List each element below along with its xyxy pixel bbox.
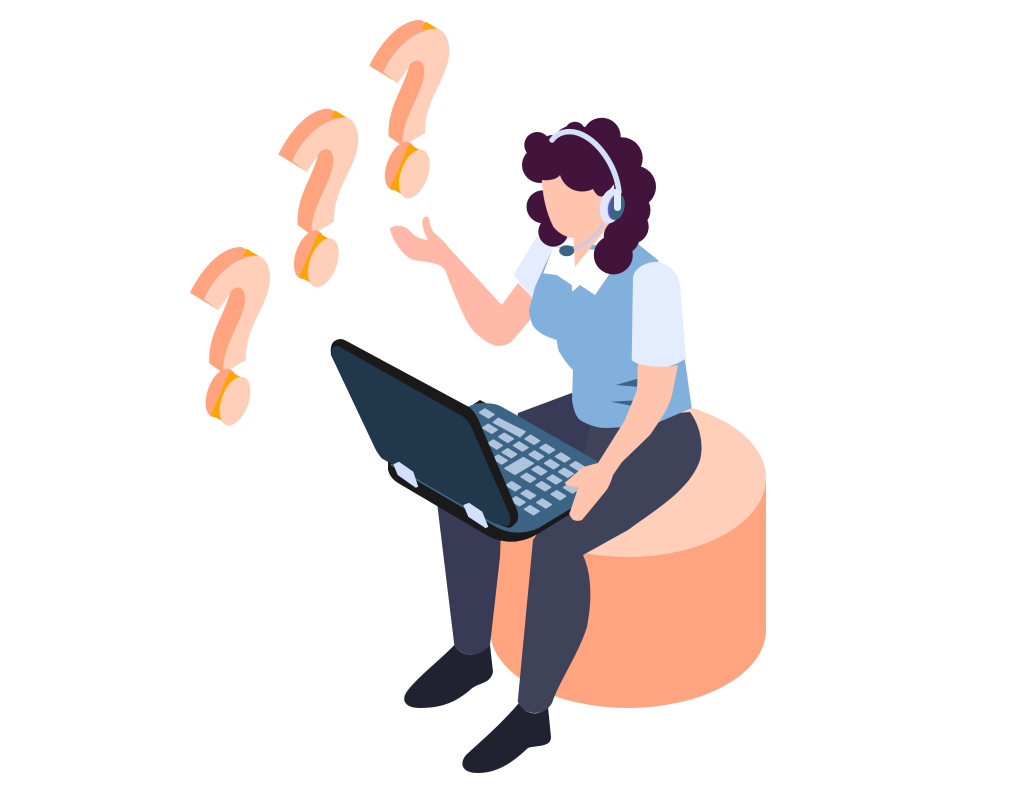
keyboard deck (390, 403, 598, 533)
cylinder stool (490, 399, 766, 708)
laptop base (388, 400, 598, 542)
headset (552, 132, 627, 256)
vest wrinkle upper (616, 378, 640, 387)
laptop (331, 339, 598, 542)
shirt collar (543, 247, 610, 295)
neck (573, 222, 612, 267)
right sleeve (632, 262, 686, 368)
headset band (552, 132, 619, 192)
mic boom (574, 223, 604, 249)
left arm and raised hand (390, 217, 532, 346)
face (542, 160, 610, 238)
icon: question mark top (369, 20, 449, 203)
vest wrinkle lower (611, 400, 640, 407)
keys (480, 409, 585, 515)
front leg and thigh (518, 412, 702, 713)
hinge left (393, 462, 418, 488)
icon: question mark middle (278, 109, 358, 291)
hinge right (463, 503, 488, 528)
back leg and thigh (437, 393, 600, 655)
left sleeve (513, 237, 552, 297)
vest (529, 243, 692, 428)
icon: question mark lower left (190, 247, 270, 430)
laptop lid border (331, 339, 518, 528)
front shoe (462, 703, 551, 773)
back shoe (404, 645, 493, 708)
hair back (522, 118, 656, 274)
laptop lid (332, 346, 510, 526)
ear cup (597, 187, 625, 225)
mic (559, 245, 574, 256)
hair fringe (525, 130, 620, 196)
right arm and hand on keyboard (565, 363, 678, 521)
